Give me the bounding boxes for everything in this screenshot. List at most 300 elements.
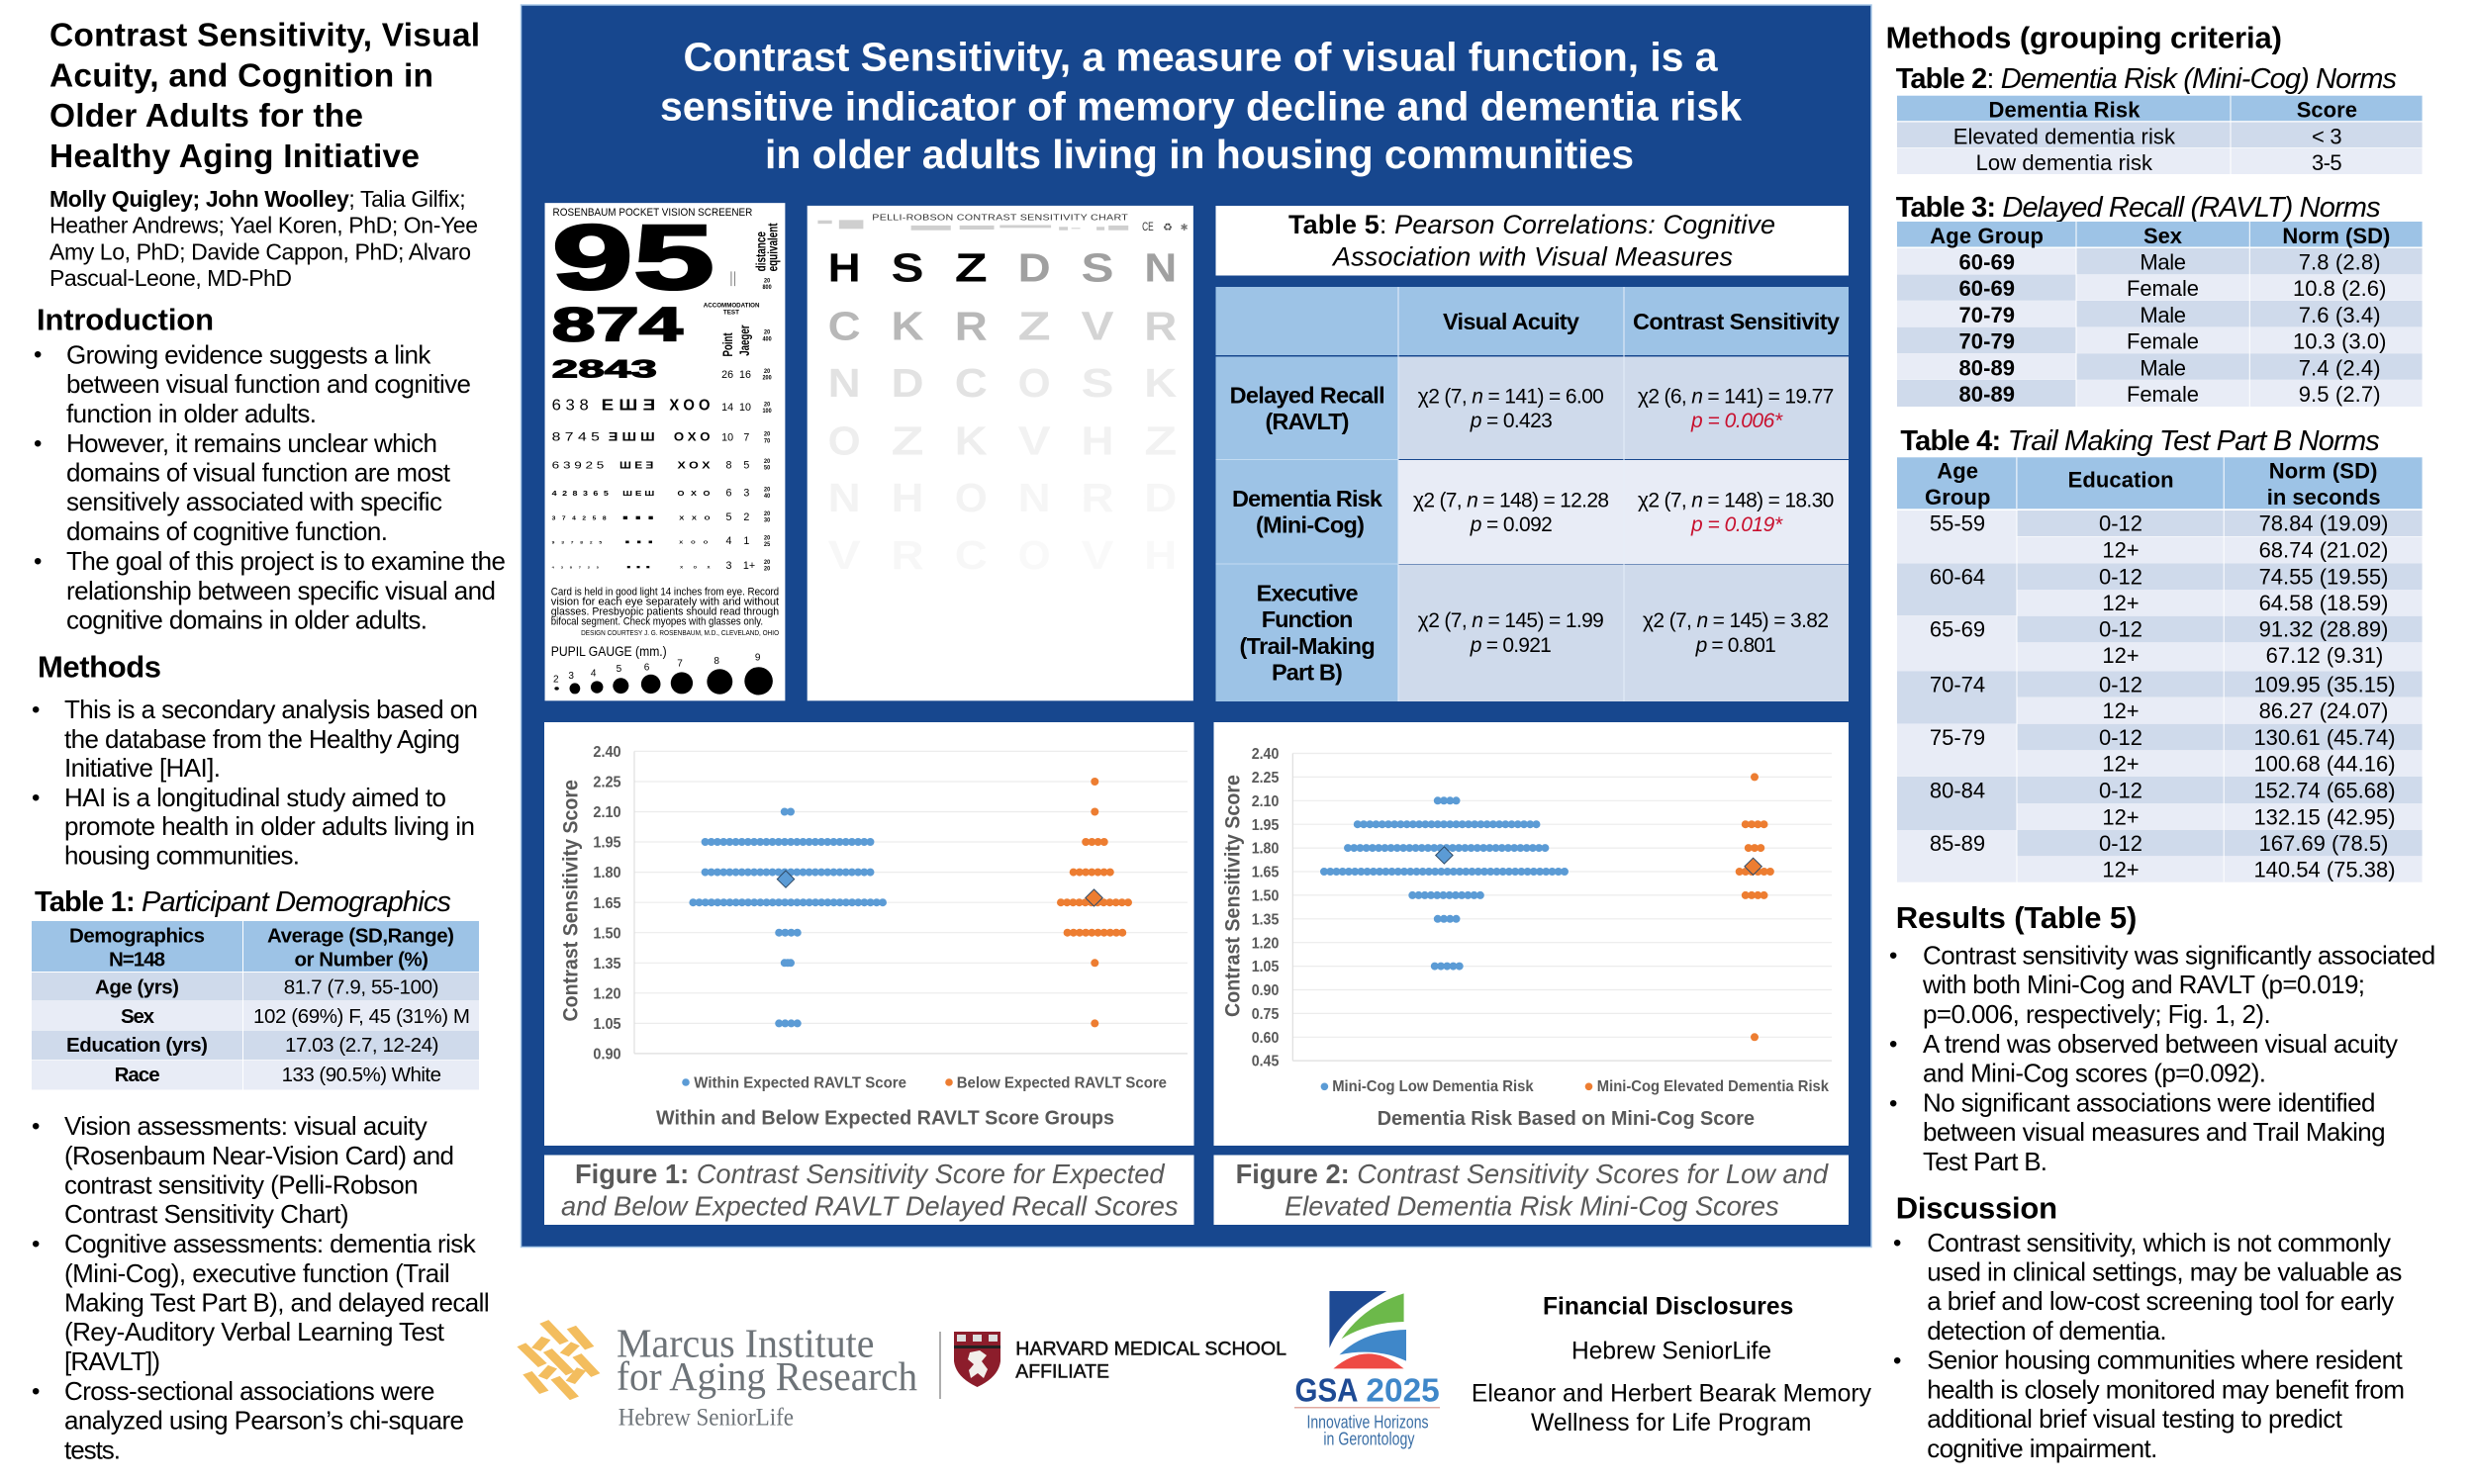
image: Pelli-Robson contrast sensitivity chart: S xyxy=(892,245,924,291)
figure 1 y-axis tick labels: 0.90 xyxy=(593,1047,621,1063)
figure 2 y-axis tick labels: 1.95 xyxy=(1252,817,1279,834)
image: Rosenbaum pocket vision screener card: bifocal segment. Check myopes with glasses only. xyxy=(551,614,763,627)
image: Pelli-Robson contrast sensitivity chart: N xyxy=(1018,476,1051,521)
image: Rosenbaum pocket vision screener card: 5 xyxy=(617,664,622,675)
image: Rosenbaum pocket vision screener card: 8 xyxy=(714,656,719,667)
image: Rosenbaum pocket vision screener card: O X O xyxy=(674,430,710,444)
image: Rosenbaum pocket vision screener card: 16 xyxy=(739,369,751,381)
results bullets: between visual measures and Trail Making xyxy=(1923,1117,2386,1147)
figure 2 gridlines and axis xyxy=(1292,754,1832,1061)
introduction bullets xyxy=(34,340,506,634)
figure 1 y-axis tick labels: 2.25 xyxy=(593,775,621,791)
table 5: Pearson correlations: Executive xyxy=(1257,580,1359,605)
table 4: trail making test norms: 74.55 (19.55) xyxy=(2259,564,2388,589)
figure 1 y-axis tick labels: 1.05 xyxy=(593,1016,621,1033)
image: Rosenbaum pocket vision screener card: Ǝ Ш Ш xyxy=(609,430,655,444)
figure 1 below-expected dots xyxy=(1061,782,1129,1023)
authors: Molly Quigley; John Woolley; Talia Gilfix; xyxy=(49,186,466,212)
figure 1 caption: and Below Expected RAVLT Delayed Recall Scores xyxy=(561,1190,1178,1221)
table 4: trail making test norms: 85-89 xyxy=(1930,831,1985,856)
introduction bullets: function in older adults. xyxy=(66,399,317,428)
logo: GSA 2025: Innovative Horizons xyxy=(1306,1412,1429,1432)
assessment bullets: • xyxy=(32,1378,40,1405)
table 1: participant demographics: or Number (%) xyxy=(295,948,428,971)
table 3: delayed recall norms: 10.3 (3.0) xyxy=(2293,329,2386,354)
image: Rosenbaum pocket vision screener card: 800 xyxy=(763,285,772,291)
main finding headline: in older adults living in housing communities xyxy=(765,132,1634,177)
image: Rosenbaum pocket vision screener card: X X O xyxy=(679,515,710,521)
table 4: trail making test norms xyxy=(1897,457,2423,882)
panel: central blue key findings xyxy=(521,5,1871,1247)
image: Pelli-Robson contrast sensitivity chart: H xyxy=(1144,533,1177,579)
image: Pelli-Robson contrast sensitivity chart: O xyxy=(1018,533,1051,579)
table 5: Pearson correlations: p = 0.423 xyxy=(1470,410,1553,432)
figure 2 caption: Figure 2: Contrast Sensitivity Scores for Low and xyxy=(1236,1159,1829,1189)
image: Rosenbaum pocket vision screener card: X O O xyxy=(669,396,710,414)
discussion bullets: used in clinical settings, may be valuable as xyxy=(1927,1256,2402,1286)
logo: Harvard Medical School affiliate xyxy=(940,1332,1286,1399)
wordmark: Marcus Institute: Marcus Institute xyxy=(617,1321,875,1366)
image: Rosenbaum pocket vision screener card: 20 xyxy=(764,560,770,566)
table 4: trail making test norms: 167.69 (78.5) xyxy=(2259,831,2388,856)
poster title: Acuity, and Cognition in xyxy=(49,58,433,95)
image: Rosenbaum pocket vision screener card: 100 xyxy=(763,409,772,415)
introduction bullets: sensitively associated with specific xyxy=(66,487,442,516)
image: Rosenbaum pocket vision screener card: 2 xyxy=(553,674,559,685)
image: Rosenbaum pocket vision screener card: 14 xyxy=(721,402,733,414)
image: Rosenbaum pocket vision screener card: 4 xyxy=(591,668,597,680)
image: Pelli-Robson contrast sensitivity chart: N xyxy=(828,476,861,521)
table 3: delayed recall norms: 60-69 xyxy=(1959,250,2015,275)
results bullets: No significant associations were identified xyxy=(1923,1088,2375,1118)
image: Rosenbaum pocket vision screener card: 30 xyxy=(764,517,770,524)
image: Rosenbaum pocket vision screener card: PUPIL GAUGE (mm.) xyxy=(551,645,667,659)
figure 2 y-axis tick labels: 1.80 xyxy=(1252,841,1279,858)
table 5: Pearson correlations: χ2 (6, n = 141) = 19.77 xyxy=(1638,386,1834,409)
main finding headline: Contrast Sensitivity, a measure of visual function, is a xyxy=(683,35,1719,80)
financial disclosures: Hebrew SeniorLife xyxy=(1571,1337,1771,1364)
figure 2 y-axis tick labels: 0.45 xyxy=(1252,1054,1279,1070)
image: Rosenbaum pocket vision screener card: 6 xyxy=(644,662,650,673)
table 2: dementia risk norms: Elevated dementia risk xyxy=(1953,124,2176,148)
table 5 title xyxy=(1215,206,1849,275)
image: Rosenbaum pocket vision screener card: DESIGN COURTESY J. G. ROSENBAUM, M.D., CLEVELAND, OHIO xyxy=(581,629,779,637)
image: Rosenbaum pocket vision screener card: 20 xyxy=(764,459,770,465)
assessment bullets: tests. xyxy=(64,1435,121,1464)
table 4: trail making test norms: 0-12 xyxy=(2099,617,2142,642)
table 4: trail making test norms: 67.12 (9.31) xyxy=(2266,643,2383,668)
results bullets: Test Part B. xyxy=(1923,1147,2047,1176)
figure 1 y-axis tick labels: 1.95 xyxy=(593,835,621,852)
table 3: delayed recall norms: Male xyxy=(2140,250,2186,275)
table 4: trail making test norms: 12+ xyxy=(2102,858,2140,882)
image: Rosenbaum pocket vision screener card xyxy=(545,203,785,700)
table 4: trail making test norms: 78.84 (19.09) xyxy=(2259,511,2388,536)
wordmark: Marcus Institute: for Aging Research xyxy=(617,1353,917,1399)
table 1: participant demographics: Education (yrs) xyxy=(66,1034,208,1057)
figure 2 low-risk dots xyxy=(1324,800,1570,967)
figure 2 caption: Elevated Dementia Risk Mini-Cog Scores xyxy=(1285,1190,1779,1221)
section: discussion xyxy=(1893,1191,2405,1463)
authors: Amy Lo, PhD; Davide Cappon, PhD; Alvaro xyxy=(49,239,471,265)
table 2: dementia risk norms xyxy=(1897,96,2423,175)
image: Rosenbaum pocket vision screener card: 6 3 9 2 5 xyxy=(552,459,605,471)
introduction bullets: relationship between specific visual and xyxy=(66,576,496,605)
table 5: Pearson correlations: χ2 (7, n = 145) = 3.82 xyxy=(1643,609,1829,632)
assessment bullets: Contrast Sensitivity Chart) xyxy=(64,1199,349,1229)
table 2: dementia risk norms: Score xyxy=(2297,97,2357,122)
image: Rosenbaum pocket vision screener card: 200 xyxy=(763,375,772,382)
image: Pelli-Robson contrast sensitivity chart: S xyxy=(1081,360,1113,406)
table 3: delayed recall norms: Norm (SD) xyxy=(2282,224,2390,248)
image: Rosenbaum pocket vision screener card: Ш E Ǝ xyxy=(619,459,653,471)
table 1: participant demographics: Average (SD,Range) xyxy=(267,924,454,947)
assessment bullets: analyzed using Pearson’s chi-square xyxy=(64,1406,464,1436)
figure 2 mean markers xyxy=(1436,847,1761,875)
results bullets: • xyxy=(1889,942,1897,970)
image: Rosenbaum pocket vision screener card: 20 xyxy=(764,511,770,517)
image: Rosenbaum pocket vision screener card: 20 xyxy=(764,330,770,336)
table 1: participant demographics: 17.03 (2.7, 12-24) xyxy=(285,1034,439,1057)
results bullets: Contrast sensitivity was significantly associated xyxy=(1923,941,2435,971)
authors: Pascual-Leone, MD-PhD xyxy=(49,265,292,291)
image: Rosenbaum pocket vision screener card: 3 xyxy=(568,671,574,682)
image: Pelli-Robson contrast sensitivity chart: O xyxy=(828,418,861,464)
figure 2 y-axis tick labels: 1.35 xyxy=(1252,911,1279,928)
assessment bullets: [RAVLT]) xyxy=(64,1346,160,1376)
image: Pelli-Robson contrast sensitivity chart: D xyxy=(1018,245,1051,291)
image: Pelli-Robson contrast sensitivity chart: Z xyxy=(955,245,988,291)
image: Rosenbaum pocket vision screener card: 400 xyxy=(763,336,772,342)
discussion bullets: • xyxy=(1893,1347,1901,1374)
table 4: trail making test norms: 109.95 (35.15) xyxy=(2253,672,2396,696)
table 4: trail making test norms: 64.58 (18.59) xyxy=(2259,591,2388,615)
table 4: trail making test norms: 12+ xyxy=(2102,643,2140,668)
image: Rosenbaum pocket vision screener card: 1 xyxy=(743,535,749,547)
image: Rosenbaum pocket vision screener card: 10 xyxy=(721,431,733,444)
poster title: Older Adults for the xyxy=(49,98,363,135)
image: Pelli-Robson contrast sensitivity chart: D xyxy=(892,360,924,406)
figure 1 legend xyxy=(682,1074,1167,1091)
table 4: trail making test norms: 132.15 (42.95) xyxy=(2253,804,2396,829)
table 4: trail making test norms: 0-12 xyxy=(2099,831,2142,856)
results bullets xyxy=(1889,941,2435,1176)
image: Rosenbaum pocket vision screener card: ■ ■ ■ xyxy=(627,565,650,570)
icon: GSA swoosh mark xyxy=(1329,1291,1406,1368)
table 4: trail making test norms: 12+ xyxy=(2102,537,2140,562)
table 1: participant demographics: Sex xyxy=(121,1005,155,1028)
image: Rosenbaum pocket vision screener card: 874 xyxy=(552,297,683,351)
image: Pelli-Robson contrast sensitivity chart: V xyxy=(1081,304,1114,349)
introduction bullets: between visual function and cognitive xyxy=(66,369,471,399)
methods bullets: HAI is a longitudinal study aimed to xyxy=(64,783,446,812)
table 4 title: Table 4: Trail Making Test Part B Norms xyxy=(1900,425,2380,457)
table 5 title: Table 5: Pearson Correlations: Cognitive xyxy=(1288,210,1775,239)
image: Rosenbaum pocket vision screener card: 50 xyxy=(764,465,770,472)
heading: introduction: Introduction xyxy=(37,303,214,336)
image: Rosenbaum pocket vision screener card: 2843 xyxy=(552,356,657,384)
table 3: delayed recall norms: 80-89 xyxy=(1959,355,2015,380)
image: Pelli-Robson contrast sensitivity chart: R xyxy=(955,304,988,349)
table 1: participant demographics: Race xyxy=(115,1064,160,1086)
image: Rosenbaum pocket vision screener card: 4 3 8 7 2 5 xyxy=(552,566,599,569)
image: Pelli-Robson contrast sensitivity chart: CE xyxy=(1142,221,1154,234)
logo: GSA 2025: in Gerontology xyxy=(1323,1430,1414,1449)
image: Rosenbaum pocket vision screener card: 7 xyxy=(677,658,683,670)
image: Rosenbaum pocket vision screener card: ROSENBAUM POCKET VISION SCREENER xyxy=(553,206,752,219)
figure 1 y-axis tick labels: 2.10 xyxy=(593,804,621,821)
table 4: trail making test norms: 60-64 xyxy=(1930,564,1985,589)
introduction bullets: Growing evidence suggests a link xyxy=(66,340,431,370)
image: Rosenbaum pocket vision screener card: 6 xyxy=(725,487,731,499)
results bullets: with both Mini-Cog and RAVLT (p=0.019; xyxy=(1922,970,2365,999)
table 1: participant demographics xyxy=(32,921,479,1090)
image: Rosenbaum pocket vision screener card: 6 3 8 xyxy=(552,396,589,414)
figure 1 y-axis tick labels: 1.50 xyxy=(593,925,621,942)
table 1 title: Table 1: Participant Demographics xyxy=(35,886,451,918)
figure 2 y-axis tick labels: 2.40 xyxy=(1252,746,1279,763)
image: Rosenbaum pocket vision screener card: 20 xyxy=(764,278,770,285)
table 4: trail making test norms: 140.54 (75.38) xyxy=(2253,858,2396,882)
figure 2 legend xyxy=(1321,1078,1829,1095)
figure 2 y-axis tick labels: 2.25 xyxy=(1252,770,1279,787)
financial disclosures xyxy=(1472,1292,1871,1437)
table 3: delayed recall norms xyxy=(1897,222,2423,407)
table 4: trail making test norms: 100.68 (44.16) xyxy=(2253,752,2396,777)
image: Rosenbaum pocket vision screener card: 5 xyxy=(725,511,731,523)
table 4: trail making test norms: 12+ xyxy=(2102,752,2140,777)
figure 1 gridlines and axis xyxy=(634,751,1188,1054)
image: Rosenbaum pocket vision screener card: X O X xyxy=(680,565,711,569)
figure 2 y-axis tick labels: 0.90 xyxy=(1252,982,1279,999)
table 2: dementia risk norms: Dementia Risk xyxy=(1989,97,2141,122)
image: Rosenbaum pocket vision screener card: 4 xyxy=(725,535,731,547)
figure 2 y-axis tick labels: 1.65 xyxy=(1252,865,1279,881)
image: Pelli-Robson contrast sensitivity chart: D xyxy=(1144,476,1177,521)
main finding headline xyxy=(660,35,1742,177)
results bullets: A trend was observed between visual acuity xyxy=(1923,1029,2398,1059)
methods bullets: housing communities. xyxy=(64,841,300,871)
introduction bullets: • xyxy=(34,341,42,368)
image: Pelli-Robson contrast sensitivity chart: Z xyxy=(1018,304,1051,349)
image: Pelli-Robson contrast sensitivity chart: V xyxy=(1081,533,1114,579)
image: Rosenbaum pocket vision screener card: distance xyxy=(753,232,769,271)
logo: Harvard Medical School affiliate: AFFILIATE xyxy=(1015,1362,1109,1383)
figure 2 y-axis title: Contrast Sensitivity Score xyxy=(1221,775,1245,1017)
introduction bullets: domains of visual function are most xyxy=(66,458,451,488)
methods bullets: the database from the Healthy Aging xyxy=(64,724,460,754)
table 3: delayed recall norms: Male xyxy=(2140,355,2186,380)
table 1: participant demographics: 81.7 (7.9, 55-100) xyxy=(284,975,439,999)
table 5: Pearson correlations: χ2 (7, n = 148) = 12.28 xyxy=(1413,489,1609,511)
table 3: delayed recall norms: Female xyxy=(2127,382,2199,407)
table 2: dementia risk norms: Low dementia risk xyxy=(1976,150,2153,175)
results bullets: • xyxy=(1889,1090,1897,1117)
table 1: participant demographics: N=148 xyxy=(109,948,165,971)
image: Pelli-Robson contrast sensitivity chart: K xyxy=(955,418,988,464)
image: Rosenbaum pocket vision screener card: vision for each eye separately with and without xyxy=(551,595,779,607)
image: Rosenbaum pocket vision screener card: O X O xyxy=(677,490,710,498)
table 4: trail making test norms: 70-74 xyxy=(1930,672,1985,696)
image: Pelli-Robson contrast sensitivity chart: O xyxy=(1018,360,1051,406)
discussion bullets: Contrast sensitivity, which is not commonly xyxy=(1927,1228,2391,1257)
table 4: trail making test norms: 80-84 xyxy=(1930,778,1985,802)
table 4: trail making test norms: 55-59 xyxy=(1930,511,1985,536)
table 2 title: Table 2: Dementia Risk (Mini-Cog) Norms xyxy=(1896,63,2397,95)
assessment bullets: Cross-sectional associations were xyxy=(64,1376,435,1406)
assessment bullets: (Rosenbaum Near-Vision Card) and xyxy=(64,1141,454,1170)
figure 1 y-axis tick labels: 1.65 xyxy=(593,895,621,912)
figure 2 elevated-risk dots xyxy=(1740,777,1770,1037)
image: Pelli-Robson contrast sensitivity chart: C xyxy=(955,360,988,406)
table 3: delayed recall norms: 60-69 xyxy=(1959,276,2015,301)
results bullets: • xyxy=(1889,1031,1897,1058)
image: Rosenbaum pocket vision screener card: Jaeger xyxy=(735,325,752,356)
discussion bullets: cognitive impairment. xyxy=(1927,1434,2157,1463)
table 3: delayed recall norms: 7.8 (2.8) xyxy=(2299,250,2381,275)
table 3: delayed recall norms: Female xyxy=(2127,329,2199,354)
image: Pelli-Robson contrast sensitivity chart: V xyxy=(1018,418,1051,464)
image: Pelli-Robson contrast sensitivity chart: V xyxy=(828,533,861,579)
figure 2 y-axis tick labels: 0.75 xyxy=(1252,1006,1279,1023)
image: Rosenbaum pocket vision screener card: 95 xyxy=(552,206,714,309)
image: Rosenbaum pocket vision screener card: X O O xyxy=(679,540,708,545)
table 5: Pearson correlations: (RAVLT) xyxy=(1265,409,1350,434)
table 4: trail making test norms: 68.74 (21.02) xyxy=(2259,537,2388,562)
table 4: trail making test norms: Education xyxy=(2068,467,2174,492)
heading: methods grouping criteria: Methods (grouping criteria) xyxy=(1886,20,2282,54)
table 5: Pearson correlations: Dementia Risk xyxy=(1232,486,1383,511)
icon: Harvard shield xyxy=(954,1332,1000,1387)
table 5: Pearson correlations: Visual Acuity xyxy=(1443,309,1579,334)
table 4: trail making test norms: 75-79 xyxy=(1930,725,1985,750)
image: Rosenbaum pocket vision screener card: 3 xyxy=(725,560,731,572)
table 5 title: Association with Visual Measures xyxy=(1331,241,1733,271)
poster title: Healthy Aging Initiative xyxy=(49,139,420,175)
image: Rosenbaum pocket vision screener card: TEST xyxy=(723,308,739,316)
poster title: Contrast Sensitivity, Visual xyxy=(49,17,480,53)
figure 2 caption xyxy=(1213,1156,1849,1225)
image: Rosenbaum pocket vision screener card: ■ ■ ■ xyxy=(625,539,653,545)
image: Pelli-Robson contrast sensitivity chart: ♻ xyxy=(1163,222,1173,233)
assessment bullets: Vision assessments: visual acuity xyxy=(64,1111,428,1141)
table 3: delayed recall norms: Sex xyxy=(2143,224,2183,248)
table 4: trail making test norms: in seconds xyxy=(2267,485,2381,510)
figure 1 mean markers xyxy=(777,871,1102,906)
image: Pelli-Robson contrast sensitivity chart: O xyxy=(955,476,988,521)
table 5: Pearson correlations: p = 0.006* xyxy=(1690,410,1783,432)
image: Rosenbaum pocket vision screener card: 9 3 7 8 2 5 xyxy=(552,540,603,544)
discussion bullets: a brief and low-cost screening tool for early xyxy=(1927,1286,2394,1316)
table 4: trail making test norms: 0-12 xyxy=(2099,564,2142,589)
image: Rosenbaum pocket vision screener card: 20 xyxy=(764,566,770,573)
table 5: Pearson correlations: χ2 (7, n = 148) = 18.30 xyxy=(1638,489,1834,511)
image: Pelli-Robson contrast sensitivity chart: S xyxy=(1081,245,1113,291)
introduction bullets: cognitive domains in older adults. xyxy=(66,604,428,634)
figure 1 y-axis tick labels: 1.20 xyxy=(593,985,621,1002)
image: Pelli-Robson contrast sensitivity chart: ✱ xyxy=(1180,222,1188,233)
figure 2 y-axis tick labels: 1.20 xyxy=(1252,935,1279,952)
image: Rosenbaum pocket vision screener card: 20 xyxy=(764,431,770,438)
image: Rosenbaum pocket vision screener card: E Ш Ǝ xyxy=(602,396,655,414)
table 5: Pearson correlations: Contrast Sensitivity xyxy=(1633,309,1840,334)
figure 1 caption xyxy=(544,1156,1193,1225)
discussion bullets: Senior housing communities where resident xyxy=(1927,1345,2403,1375)
table 5: Pearson correlations: (Trail-Making xyxy=(1239,633,1376,659)
image: Pelli-Robson contrast sensitivity chart: K xyxy=(1144,360,1177,406)
figure 1 within-expected dots xyxy=(693,811,883,1023)
table 4: trail making test norms: 0-12 xyxy=(2099,511,2142,536)
figure 1 y-axis tick labels: 1.35 xyxy=(593,956,621,973)
heading: discussion: Discussion xyxy=(1896,1191,2057,1226)
results bullets: p=0.006, respectively; Fig. 1, 2). xyxy=(1923,999,2271,1029)
image: Rosenbaum pocket vision screener card: 40 xyxy=(764,494,770,500)
figure 1 y-axis title: Contrast Sensitivity Score xyxy=(559,780,582,1021)
methods bullets: Initiative [HAI]. xyxy=(64,753,221,783)
image: Pelli-Robson contrast sensitivity chart xyxy=(808,206,1193,700)
table 3: delayed recall norms: 70-79 xyxy=(1959,303,2015,327)
image: Pelli-Robson contrast sensitivity chart: Z xyxy=(1144,418,1177,464)
figure 1 y-axis tick labels: 2.40 xyxy=(593,744,621,761)
image: Pelli-Robson contrast sensitivity chart: K xyxy=(892,304,924,349)
table 2: dementia risk norms: 3-5 xyxy=(2312,150,2342,175)
figure 1 legend: Below Expected RAVLT Score xyxy=(957,1074,1167,1091)
image: Rosenbaum pocket vision screener card: Point xyxy=(718,332,735,356)
assessment bullets: • xyxy=(32,1113,40,1140)
table 1: participant demographics: 102 (69%) F, 45 (31%) M xyxy=(253,1005,470,1028)
authors xyxy=(49,186,478,291)
table 4: trail making test norms: 0-12 xyxy=(2099,778,2142,802)
table 3: delayed recall norms: 10.8 (2.6) xyxy=(2293,276,2386,301)
table 5: Pearson correlations: Part B) xyxy=(1272,660,1343,686)
table 3 title: Table 3: Delayed Recall (RAVLT) Norms xyxy=(1896,192,2381,224)
wordmark: Marcus Institute: Hebrew SeniorLife xyxy=(618,1405,794,1432)
figure 1 y-axis tick labels: 1.80 xyxy=(593,865,621,881)
icon: gold woven mark xyxy=(522,1322,596,1398)
image: Rosenbaum pocket vision screener card: 5 xyxy=(743,459,749,471)
discussion bullets: detection of dementia. xyxy=(1927,1316,2167,1345)
table 5: Pearson correlations: Function xyxy=(1262,606,1353,632)
image: Pelli-Robson contrast sensitivity chart: C xyxy=(828,304,861,349)
image: Rosenbaum pocket vision screener card: 20 xyxy=(764,535,770,542)
image: Rosenbaum pocket vision screener card: Ш E Ш xyxy=(622,489,654,498)
assessment bullets: contrast sensitivity (Pelli-Robson xyxy=(64,1169,419,1199)
figure 2 legend: Mini-Cog Low Dementia Risk xyxy=(1332,1078,1534,1095)
methods bullets xyxy=(32,695,478,871)
image: Rosenbaum pocket vision screener card: equivalent xyxy=(765,223,781,271)
table 5: Pearson correlations: p = 0.801 xyxy=(1695,634,1776,657)
table 4: trail making test norms: Age xyxy=(1937,458,1978,483)
table 4: trail making test norms: 152.74 (65.68) xyxy=(2253,778,2396,802)
table 5: Pearson correlations: p = 0.921 xyxy=(1470,634,1552,657)
table 5: Pearson correlations: p = 0.092 xyxy=(1470,513,1553,536)
image: Pelli-Robson contrast sensitivity chart: N xyxy=(828,360,861,406)
image: Rosenbaum pocket vision screener card: 8 7 4 5 xyxy=(552,430,600,444)
table 3: delayed recall norms: 9.5 (2.7) xyxy=(2299,382,2381,407)
table 5: Pearson correlations: (Mini-Cog) xyxy=(1256,512,1365,538)
figure 2 legend: Mini-Cog Elevated Dementia Risk xyxy=(1597,1078,1829,1095)
poster title xyxy=(49,17,480,175)
introduction bullets: The goal of this project is to examine the xyxy=(66,546,506,576)
assessment bullets xyxy=(32,1111,490,1464)
table 4: trail making test norms: 0-12 xyxy=(2099,672,2142,696)
image: Rosenbaum pocket vision screener card: glasses. Presbyopic patients should read through xyxy=(551,604,779,617)
methods bullets: This is a secondary analysis based on xyxy=(64,695,478,724)
table 5: Pearson correlations: p = 0.019* xyxy=(1690,513,1783,536)
figure 2: contrast sensitivity by Mini-Cog group chart xyxy=(1213,722,1849,1146)
image: Pelli-Robson contrast sensitivity chart: C xyxy=(955,533,988,579)
assessment bullets: Making Test Part B), and delayed recall xyxy=(64,1288,490,1318)
